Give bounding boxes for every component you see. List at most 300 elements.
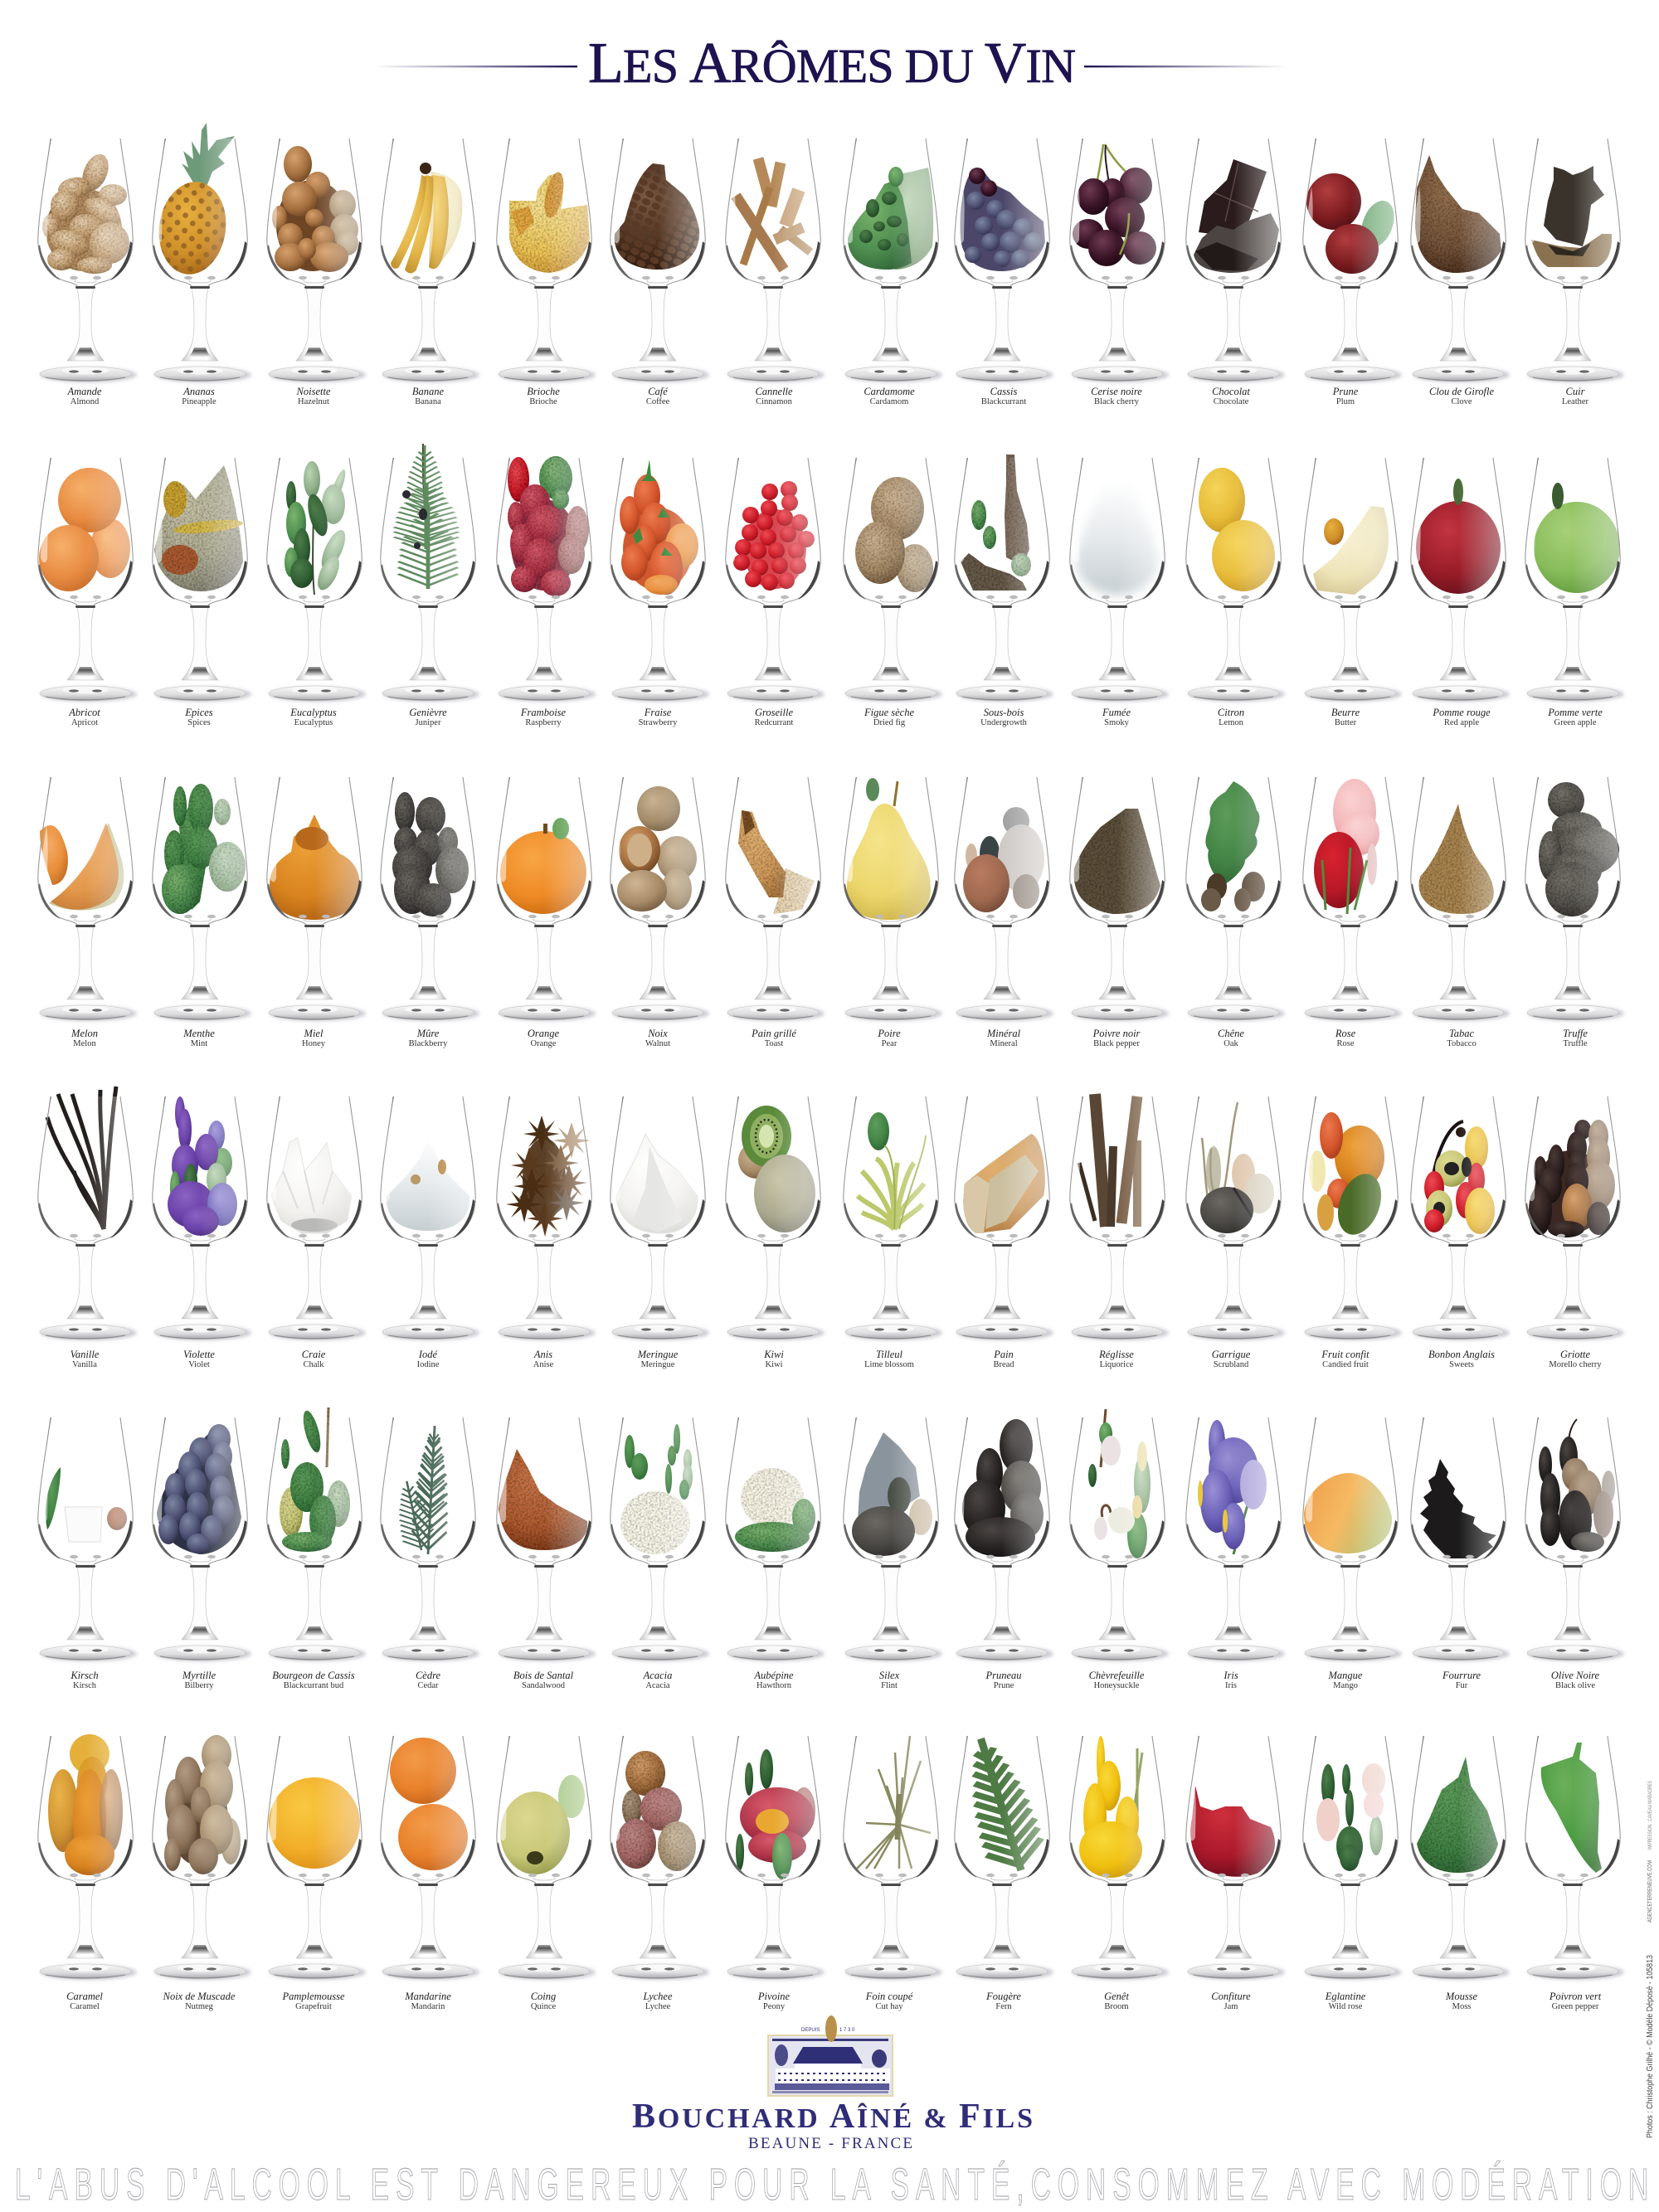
label: Mousse bbox=[1446, 1991, 1477, 2002]
flint bbox=[852, 1432, 932, 1556]
label: Fur bbox=[1456, 1681, 1468, 1690]
glass bbox=[1186, 777, 1285, 1021]
label: Kiwi bbox=[765, 1360, 783, 1369]
glass bbox=[1303, 1096, 1402, 1340]
label: Cannelle bbox=[755, 386, 793, 397]
label: Bread bbox=[993, 1360, 1014, 1369]
strawberries bbox=[620, 459, 698, 595]
glass: Kirsch bbox=[38, 1417, 137, 1690]
label: Honey bbox=[302, 1039, 326, 1048]
glass bbox=[1186, 458, 1285, 702]
label: Garrigue bbox=[1212, 1349, 1250, 1360]
vanilla pods bbox=[47, 1087, 116, 1229]
glass bbox=[955, 777, 1053, 1021]
glass bbox=[38, 1736, 137, 1980]
logo: Bouchard crest and estate engraving: 1 7 3 0 bbox=[839, 2028, 855, 2033]
label: Amande bbox=[68, 386, 101, 397]
glass bbox=[1411, 1417, 1510, 1661]
glass: Mangue bbox=[1303, 1417, 1402, 1690]
chocolate bbox=[1194, 159, 1279, 273]
glass: Pain grillé bbox=[726, 777, 825, 1048]
glass: Vanille bbox=[38, 1087, 137, 1369]
glass: Clou de Girofle bbox=[1411, 139, 1510, 406]
acacia bbox=[620, 1424, 693, 1554]
glass: Poivron vert bbox=[1525, 1736, 1624, 2011]
photo credit: Photos : Christophe Grilhé - © Modèle Déposé - 105813 bbox=[1645, 1955, 1655, 2138]
label: Pear bbox=[882, 1039, 898, 1048]
glass: Meringue bbox=[611, 1096, 709, 1369]
glass: Craie bbox=[267, 1096, 366, 1369]
label: Coing bbox=[531, 1991, 556, 2002]
glass: Mûre bbox=[381, 777, 479, 1048]
glass bbox=[267, 1736, 366, 1980]
title rule left bbox=[374, 66, 577, 67]
label: Plum bbox=[1336, 397, 1355, 406]
label: Apricot bbox=[71, 718, 98, 727]
label: Mûre bbox=[417, 1028, 439, 1039]
label: Undergrowth bbox=[980, 718, 1028, 727]
label: Café bbox=[648, 386, 668, 397]
label: Pomme rouge bbox=[1433, 707, 1491, 718]
glass: Pamplemousse bbox=[267, 1736, 366, 2011]
label: Mint bbox=[191, 1039, 207, 1048]
label: Iodine bbox=[417, 1360, 440, 1369]
label: Réglisse bbox=[1099, 1349, 1134, 1360]
glass: Cuir bbox=[1525, 139, 1624, 406]
label: Banane bbox=[412, 386, 444, 397]
salt bbox=[387, 1138, 469, 1231]
glass bbox=[1525, 1736, 1624, 1980]
glass: Pomme rouge bbox=[1411, 458, 1510, 727]
label: Eucalyptus bbox=[294, 718, 333, 727]
label: Chèvrefeuille bbox=[1089, 1670, 1144, 1681]
label: Bois de Santal bbox=[513, 1670, 573, 1681]
cedar sprig bbox=[391, 1425, 452, 1555]
glass: Pain bbox=[955, 1096, 1053, 1369]
label: Fruit confit bbox=[1321, 1349, 1370, 1360]
glass bbox=[153, 458, 251, 702]
logo: Bouchard crest and estate engraving: DEPUIS bbox=[801, 2028, 820, 2033]
glass bbox=[1070, 1096, 1169, 1340]
glass: Pruneau bbox=[955, 1417, 1053, 1690]
glass bbox=[267, 777, 366, 1021]
label: Blackcurrant bbox=[981, 397, 1026, 406]
glass bbox=[726, 139, 825, 382]
black cherries bbox=[1073, 144, 1156, 266]
label: Aubépine bbox=[754, 1670, 794, 1681]
pear bbox=[847, 778, 931, 920]
label: Lychee bbox=[645, 2002, 670, 2011]
label: Chocolat bbox=[1212, 386, 1250, 397]
black olives bbox=[1539, 1419, 1615, 1552]
glass: Chèvrefeuille bbox=[1070, 1409, 1169, 1690]
hazelnuts bbox=[272, 146, 358, 272]
label: Ananas bbox=[183, 386, 215, 397]
label: Black pepper bbox=[1093, 1039, 1140, 1048]
undergrowth bbox=[961, 455, 1031, 591]
coffee beans bbox=[615, 163, 699, 270]
glass: Garrigue bbox=[1186, 1096, 1285, 1369]
glass bbox=[381, 777, 479, 1021]
label: Violette bbox=[183, 1349, 215, 1360]
peony bbox=[736, 1749, 815, 1879]
glass bbox=[1411, 458, 1510, 702]
glass bbox=[381, 458, 479, 702]
star anise bbox=[506, 1116, 590, 1237]
glass bbox=[267, 458, 366, 702]
label: Green apple bbox=[1554, 718, 1597, 727]
label: Iodé bbox=[419, 1349, 437, 1360]
glass bbox=[1070, 458, 1169, 702]
health warning: L'ABUS D'ALCOOL EST DANGEREUX POUR LA SANTÉ,CONSOMMEZ AVEC MODÉRATION bbox=[15, 2159, 1648, 2210]
glass bbox=[726, 777, 825, 1021]
glass bbox=[844, 1096, 942, 1340]
glass bbox=[497, 1736, 596, 1980]
agency credit: AGENCETERRENEUVE.COM bbox=[1647, 1860, 1653, 1923]
glass: Fourrure bbox=[1411, 1417, 1510, 1690]
smoke bbox=[1076, 479, 1159, 595]
label: Green pepper bbox=[1552, 2002, 1599, 2011]
label: Olive Noire bbox=[1551, 1670, 1599, 1681]
label: Red apple bbox=[1444, 718, 1479, 727]
glass bbox=[1303, 777, 1402, 1021]
glass: Chocolat bbox=[1186, 139, 1285, 406]
brand name: BOUCHARD AÎNÉ & FILS bbox=[632, 2098, 1033, 2136]
glass: Cassis bbox=[955, 139, 1053, 406]
label: Orange bbox=[528, 1028, 559, 1039]
glass: Beurre bbox=[1303, 458, 1402, 727]
glass: Bourgeon de Cassis bbox=[267, 1407, 366, 1690]
glass bbox=[1411, 1736, 1510, 1980]
title: LES ARÔMES DU VIN bbox=[588, 32, 1076, 95]
label: Rose bbox=[1337, 1039, 1355, 1048]
orange bbox=[500, 818, 586, 914]
glass: Tilleul bbox=[844, 1096, 942, 1369]
label: Acacia bbox=[645, 1681, 670, 1690]
label: Cardamome bbox=[864, 386, 915, 397]
label: Hawthorn bbox=[757, 1681, 792, 1690]
label: Pruneau bbox=[985, 1670, 1022, 1681]
glass bbox=[844, 458, 942, 702]
glass bbox=[726, 1096, 825, 1340]
glass: Chêne bbox=[1186, 777, 1285, 1048]
label: Lemon bbox=[1219, 718, 1244, 727]
glass bbox=[844, 1736, 942, 1980]
label: Violet bbox=[188, 1360, 210, 1369]
rose bbox=[1314, 779, 1379, 914]
glass bbox=[1525, 139, 1624, 382]
glass bbox=[1525, 458, 1624, 702]
label: Leather bbox=[1562, 397, 1589, 406]
grapefruit bbox=[269, 1777, 360, 1869]
glass bbox=[381, 1736, 479, 1980]
glass bbox=[726, 458, 825, 702]
label: Cinnamon bbox=[756, 397, 793, 406]
mango bbox=[1304, 1473, 1392, 1553]
glass: Genièvre bbox=[381, 444, 479, 727]
label: Noix bbox=[648, 1028, 668, 1039]
glass bbox=[38, 458, 137, 702]
stones bbox=[963, 807, 1044, 912]
glass bbox=[611, 1736, 709, 1980]
label: Minéral bbox=[987, 1028, 1020, 1039]
candied fruit bbox=[1309, 1112, 1389, 1241]
label: Tobacco bbox=[1447, 1039, 1477, 1048]
glass: Café bbox=[611, 139, 709, 406]
label: Redcurrant bbox=[755, 718, 793, 727]
glass: Fraise bbox=[611, 458, 709, 727]
glass: Pomme verte bbox=[1525, 458, 1624, 727]
label: Confiture bbox=[1211, 1991, 1251, 2002]
label: Strawberry bbox=[639, 718, 678, 727]
meringue bbox=[616, 1134, 698, 1233]
truffle bbox=[1539, 782, 1619, 916]
label: Cassis bbox=[990, 386, 1017, 397]
label: Vanilla bbox=[72, 1360, 97, 1369]
label: Figue sèche bbox=[864, 707, 914, 718]
label: Iris bbox=[1225, 1681, 1237, 1690]
label: Sweets bbox=[1449, 1360, 1474, 1369]
label: Fougère bbox=[986, 1991, 1021, 2002]
raspberries bbox=[508, 456, 589, 596]
label: Beurre bbox=[1331, 707, 1360, 718]
label: Tabac bbox=[1449, 1028, 1474, 1039]
glass: Mandarine bbox=[381, 1736, 479, 2011]
glass: Cèdre bbox=[381, 1417, 479, 1690]
glass bbox=[497, 777, 596, 1021]
glass: Myrtille bbox=[153, 1417, 251, 1690]
label: Brioche bbox=[529, 397, 557, 406]
glass bbox=[611, 139, 709, 382]
label: Anis bbox=[534, 1349, 552, 1360]
label: Bilberry bbox=[184, 1681, 214, 1690]
label: Poivron vert bbox=[1550, 1991, 1601, 2002]
glass bbox=[1411, 139, 1510, 382]
label: Almond bbox=[71, 397, 100, 406]
glass bbox=[153, 139, 251, 382]
red apple bbox=[1416, 479, 1501, 594]
label: Black cherry bbox=[1094, 397, 1140, 406]
glass: Amande bbox=[38, 139, 137, 406]
label: Pamplemousse bbox=[282, 1991, 345, 2002]
label: Pain bbox=[994, 1349, 1014, 1360]
butter and spoon bbox=[1313, 506, 1389, 595]
label: Peony bbox=[763, 2002, 786, 2011]
label: Foin coupé bbox=[866, 1991, 912, 2002]
label: Sandalwood bbox=[522, 1681, 566, 1690]
label: Caramel bbox=[66, 1991, 103, 2002]
blackberries bbox=[392, 792, 469, 916]
label: Framboise bbox=[521, 707, 566, 718]
glass bbox=[1070, 777, 1169, 1021]
cut hay bbox=[857, 1736, 931, 1869]
broom flowers bbox=[1079, 1736, 1142, 1878]
glass: Anis bbox=[497, 1096, 596, 1369]
mint leaves bbox=[162, 784, 246, 914]
glass bbox=[1303, 1736, 1402, 1980]
label: Abricot bbox=[69, 707, 100, 718]
jam bbox=[1190, 1786, 1275, 1877]
glass: Bonbon Anglais bbox=[1411, 1096, 1510, 1369]
glass bbox=[153, 1417, 251, 1661]
glass: Noix de Muscade bbox=[153, 1735, 251, 2011]
label: Juniper bbox=[416, 718, 441, 727]
glass: Orange bbox=[497, 777, 596, 1048]
glass: Truffe bbox=[1525, 777, 1624, 1048]
label: Miel bbox=[304, 1028, 323, 1039]
label: Butter bbox=[1335, 718, 1357, 727]
glass bbox=[153, 1736, 251, 1980]
glass: Ananas bbox=[153, 123, 251, 406]
label: Grapefruit bbox=[295, 2002, 332, 2011]
label: Walnut bbox=[645, 1039, 670, 1048]
glass: Rose bbox=[1303, 777, 1402, 1048]
almonds bbox=[42, 150, 129, 274]
glass: Cerise noire bbox=[1070, 139, 1169, 406]
label: Griotte bbox=[1560, 1349, 1590, 1360]
label: Melon bbox=[73, 1039, 96, 1048]
label: Cèdre bbox=[416, 1670, 440, 1681]
label: Clove bbox=[1451, 397, 1472, 406]
glass bbox=[844, 1417, 942, 1661]
glass: Noisette bbox=[267, 139, 366, 406]
glass: Poivre noir bbox=[1070, 777, 1169, 1048]
redcurrants bbox=[733, 481, 815, 591]
glass: Silex bbox=[844, 1417, 942, 1690]
blackcurrants bbox=[960, 168, 1045, 271]
glass: Griotte bbox=[1525, 1096, 1624, 1369]
moss bbox=[1417, 1757, 1498, 1873]
glass: Abricot bbox=[38, 458, 137, 727]
liquorice sweets bbox=[1424, 1121, 1495, 1234]
mandarins bbox=[390, 1738, 468, 1870]
label: Rose bbox=[1335, 1028, 1355, 1039]
bread bbox=[963, 1134, 1045, 1233]
glass: Pivoine bbox=[726, 1736, 825, 2011]
glass bbox=[1186, 1417, 1285, 1661]
glass: Minéral bbox=[955, 777, 1053, 1048]
bilberries bbox=[157, 1424, 241, 1554]
glass: Fumée bbox=[1070, 458, 1169, 727]
glass: Miel bbox=[267, 777, 366, 1048]
cloves bbox=[1415, 155, 1501, 273]
glass: Citron bbox=[1186, 458, 1285, 727]
glass bbox=[1303, 458, 1402, 702]
black pepper bbox=[1074, 809, 1160, 914]
honey bbox=[270, 814, 360, 920]
dried figs bbox=[855, 477, 933, 592]
glass: Foin coupé bbox=[844, 1736, 942, 2011]
label: Genêt bbox=[1104, 1991, 1129, 2002]
kiwi bbox=[738, 1106, 815, 1232]
label: Epices bbox=[185, 707, 213, 718]
label: Cardamom bbox=[870, 397, 908, 406]
glass: Kiwi bbox=[726, 1096, 825, 1369]
print credit: IMPRESSION : CAVEAU MARAGRES bbox=[1648, 1781, 1653, 1850]
label: Sous-bois bbox=[984, 707, 1024, 718]
label: Scrubland bbox=[1214, 1360, 1249, 1369]
label: Groseille bbox=[755, 707, 793, 718]
kirsch leaf, shot glass and cherry bbox=[46, 1467, 127, 1542]
glass bbox=[497, 458, 596, 702]
label: Tilleul bbox=[876, 1349, 902, 1360]
caramel shards bbox=[48, 1734, 123, 1875]
fur bbox=[1420, 1459, 1496, 1558]
glass: Violette bbox=[153, 1096, 251, 1369]
glass bbox=[955, 1096, 1053, 1340]
glass: Eucalyptus bbox=[267, 458, 366, 727]
label: Orange bbox=[531, 1039, 557, 1048]
glass bbox=[497, 1096, 596, 1340]
glass: Noix bbox=[611, 777, 709, 1048]
label: Cerise noire bbox=[1091, 386, 1142, 397]
label: Kiwi bbox=[764, 1349, 784, 1360]
glass bbox=[267, 139, 366, 382]
toast bbox=[738, 810, 815, 914]
label: Anise bbox=[533, 1360, 554, 1369]
oak leaf and acorns bbox=[1201, 781, 1265, 912]
label: Mandarine bbox=[405, 1991, 451, 2002]
glass bbox=[38, 1096, 137, 1340]
walnuts bbox=[617, 786, 697, 912]
lychees bbox=[616, 1751, 696, 1871]
label: Chêne bbox=[1218, 1028, 1244, 1039]
glass: Melon bbox=[38, 777, 137, 1048]
glass: Cardamome bbox=[844, 139, 942, 406]
label: Broom bbox=[1104, 2002, 1129, 2011]
glass: Fruit confit bbox=[1303, 1096, 1402, 1369]
label: Bourgeon de Cassis bbox=[272, 1670, 355, 1681]
label: Cedar bbox=[417, 1681, 439, 1690]
label: Spices bbox=[187, 718, 211, 727]
glass bbox=[1303, 139, 1402, 382]
label: Quince bbox=[531, 2002, 556, 2011]
label: Nutmeg bbox=[185, 2002, 214, 2011]
juniper bbox=[394, 444, 459, 589]
glass bbox=[726, 1736, 825, 1980]
plums bbox=[1306, 173, 1400, 274]
label: Lychee bbox=[643, 1991, 673, 2002]
brioche bbox=[509, 171, 590, 273]
glass: Aubépine bbox=[726, 1417, 825, 1690]
fern bbox=[953, 1730, 1048, 1879]
cardamom pods bbox=[848, 167, 933, 270]
label: Craie bbox=[302, 1349, 325, 1360]
label: Toast bbox=[765, 1039, 783, 1048]
label: Poivre noir bbox=[1093, 1028, 1140, 1039]
label: Fourrure bbox=[1443, 1670, 1481, 1681]
label: Eucalyptus bbox=[290, 707, 337, 718]
label: Oak bbox=[1224, 1039, 1238, 1048]
glass: Confiture bbox=[1186, 1736, 1285, 2011]
morello cherries bbox=[1529, 1120, 1615, 1237]
scrubland bbox=[1200, 1102, 1274, 1233]
glass bbox=[611, 1096, 709, 1340]
glass bbox=[1411, 777, 1510, 1021]
cinnamon sticks bbox=[736, 158, 810, 270]
glass bbox=[153, 1096, 251, 1340]
wild rose bbox=[1316, 1763, 1385, 1871]
label: Pain grillé bbox=[752, 1028, 796, 1039]
green apple bbox=[1534, 483, 1620, 593]
label: Noix de Muscade bbox=[163, 1991, 235, 2002]
glass: Olive Noire bbox=[1525, 1417, 1624, 1690]
glass bbox=[1070, 1417, 1169, 1661]
tobacco bbox=[1419, 804, 1494, 914]
label: Noisette bbox=[297, 386, 330, 397]
glass: Brioche bbox=[497, 139, 596, 406]
label: Kirsch bbox=[73, 1681, 97, 1690]
